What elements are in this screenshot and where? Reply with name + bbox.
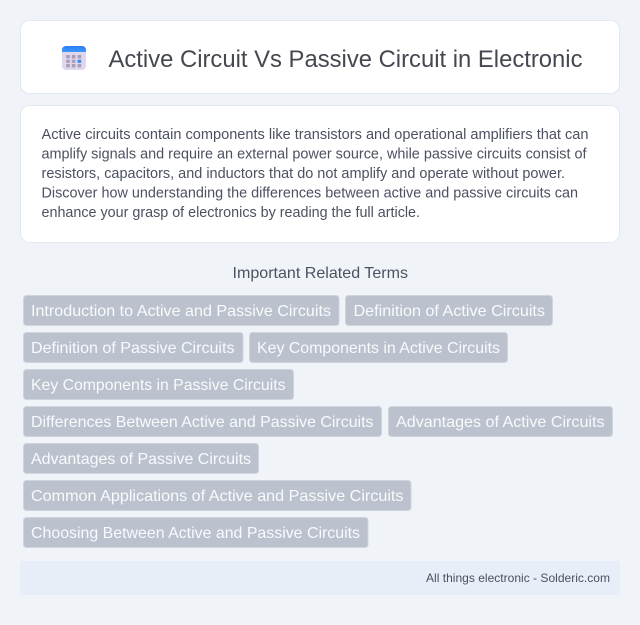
text block: description — [42, 127, 588, 221]
text block: description: resistors, capacitors, and inductors that do not amplify and operate without power. — [42, 166, 565, 182]
text block: description: Active circuits contain components like transistors and operational amplifiers that can — [42, 127, 588, 143]
tag: Definition of Passive Circuits — [31, 340, 235, 357]
tag: Definition of Active Circuits — [354, 303, 545, 320]
tag list — [24, 296, 612, 548]
tag: Advantages of Passive Circuits — [31, 451, 251, 468]
tag — [24, 518, 368, 548]
tag: Introduction to Active and Passive Circuits — [31, 303, 331, 320]
icon: calendar — [62, 46, 86, 70]
panel: title header — [20, 20, 620, 94]
tag — [24, 480, 411, 510]
heading: important related terms: Important Related Terms — [232, 265, 408, 282]
tag — [24, 296, 339, 326]
tag — [24, 406, 382, 436]
tag — [24, 444, 258, 474]
tag: Key Components in Passive Circuits — [31, 377, 286, 394]
footer: All things electronic - Solderic.com — [426, 571, 610, 585]
tag: Common Applications of Active and Passive Circuits — [31, 488, 404, 505]
tag — [24, 370, 294, 400]
tag: Key Components in Active Circuits — [257, 340, 500, 357]
tag: Choosing Between Active and Passive Circuits — [31, 525, 360, 542]
tag: Differences Between Active and Passive Circuits — [31, 414, 374, 431]
tag — [388, 406, 612, 436]
tag: Advantages of Active Circuits — [396, 414, 604, 431]
tag — [250, 332, 508, 362]
panel: description — [20, 106, 620, 242]
text block: description: amplify signals and require an external power source, while passive circuits consist of — [42, 146, 587, 162]
title: Active Circuit Vs Passive Circuit in Electronic — [108, 46, 582, 73]
text block: description: enhance your grasp of electronics by reading the full article. — [42, 205, 420, 221]
tag — [24, 332, 243, 362]
text block: description: Discover how understanding the differences between active and passive circuits can — [42, 186, 578, 202]
footer — [20, 561, 620, 595]
tag — [346, 296, 552, 326]
